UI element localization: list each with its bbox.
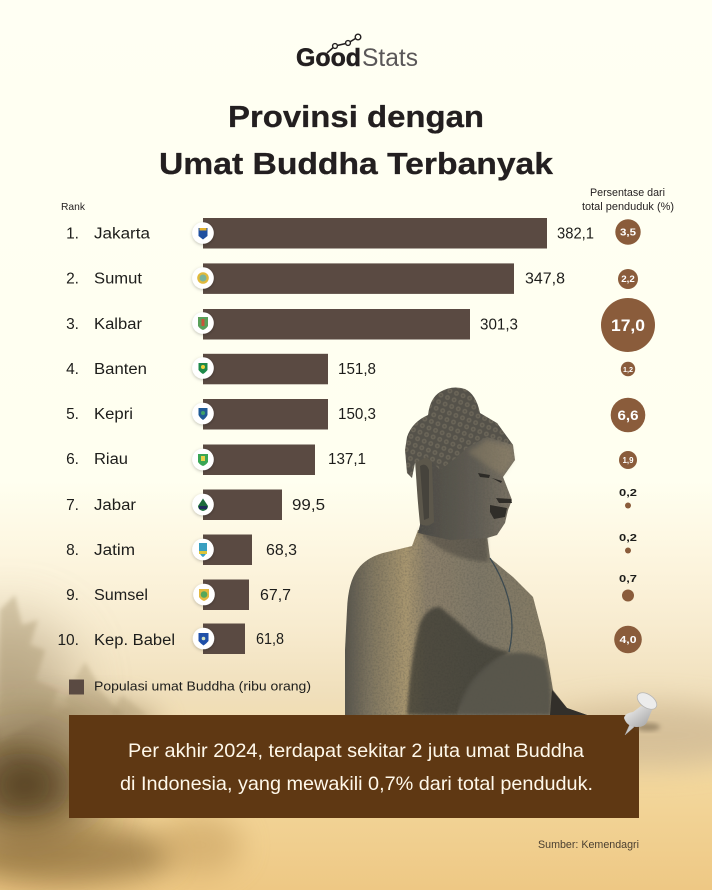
- row 4: Banten: [66, 354, 376, 384]
- icon: push pin: [624, 689, 660, 735]
- bubble: Jatim 0,2: [619, 532, 637, 554]
- row 6: Riau: 6.: [66, 451, 79, 468]
- row 8: Jatim: 68,3: [266, 542, 297, 559]
- row 5: Kepri: [66, 399, 376, 430]
- legend: Populasi umat Buddha (ribu orang): [94, 678, 311, 694]
- row 7: Jabar: 99,5: [292, 497, 325, 514]
- bubble: Kepri 6,6: 6,6: [618, 408, 639, 423]
- row 7: Jabar: Jabar: [94, 497, 136, 514]
- row 5: Kepri: Kepri: [94, 406, 133, 423]
- title: Provinsi dengan: [228, 99, 484, 134]
- row 1: Jakarta: [66, 218, 594, 248]
- row 2: Sumut: [66, 263, 565, 294]
- row 9: Sumsel: Sumsel: [94, 587, 148, 604]
- row 2: Sumut: 2.: [66, 271, 79, 288]
- row 9: Sumsel: 9.: [66, 587, 79, 604]
- row 8: Jatim: Jatim: [94, 542, 135, 559]
- row 6: Riau: 137,1: [328, 451, 366, 468]
- column header: percentage: Persentase dari: [590, 187, 665, 199]
- row 6: Riau: Riau: [94, 451, 128, 468]
- row 3: Kalbar: Kalbar: [94, 316, 142, 333]
- column header: percentage: [582, 187, 674, 213]
- bubble: Jabar 0,2: 0,2: [619, 487, 637, 499]
- row 7: Jabar: [66, 490, 325, 520]
- bubble: Sumut 2,2: [618, 269, 638, 289]
- row 2: Sumut: Sumut: [94, 271, 143, 288]
- row 1: Jakarta: 382,1: [557, 226, 594, 242]
- row 1: Jakarta: 1.: [66, 226, 79, 242]
- callout box: [69, 715, 639, 818]
- bubble: Jakarta 3,5: 3,5: [620, 228, 636, 238]
- bubble: Kepri 6,6: [611, 398, 645, 432]
- row 10: Kep. Babel: 10.: [57, 632, 79, 649]
- bubble: Kalbar 17,0: 17,0: [611, 316, 645, 335]
- row 6: Riau: [66, 444, 366, 475]
- row 10: Kep. Babel: 61,8: [256, 631, 284, 648]
- row 5: Kepri: 5.: [66, 406, 79, 423]
- row 4: Banten: 151,8: [338, 361, 376, 378]
- row 3: Kalbar: 301,3: [480, 316, 518, 334]
- bubble: Kep. Babel 4,0: 4,0: [620, 634, 637, 646]
- row 4: Banten: Banten: [94, 361, 147, 378]
- title: [159, 99, 554, 181]
- row 2: Sumut: 347,8: [525, 271, 565, 288]
- row 7: Jabar: 7.: [66, 497, 79, 514]
- row 3: Kalbar: 3.: [66, 316, 79, 333]
- callout box: Per akhir 2024, terdapat sekitar 2 juta umat Buddha: [128, 740, 584, 762]
- bubble: Sumut 2,2: 2,2: [621, 274, 635, 284]
- row 8: Jatim: 8.: [66, 542, 79, 559]
- callout box: di Indonesia, yang mewakili 0,7% dari total penduduk.: [120, 773, 593, 795]
- bubble: Sumsel 0,7: [619, 573, 637, 602]
- bubble: Banten 1,2: [621, 362, 635, 376]
- row 10: Kep. Babel: [57, 624, 284, 654]
- row 1: Jakarta: Jakarta: [94, 226, 150, 242]
- bubble: Jatim 0,2: 0,2: [619, 532, 637, 544]
- bubble: Riau 1,9: 1,9: [622, 455, 634, 465]
- row 3: Kalbar: [66, 309, 518, 340]
- row 5: Kepri: 150,3: [338, 406, 376, 423]
- row 4: Banten: 4.: [66, 361, 79, 378]
- column header: rank: Rank: [61, 201, 86, 213]
- statue: seated Buddha: [345, 388, 587, 715]
- bubble: Sumsel 0,7: 0,7: [619, 573, 637, 585]
- logo: GoodStats: [296, 34, 418, 72]
- bubble: Kep. Babel 4,0: [614, 626, 642, 653]
- row 9: Sumsel: 67,7: [260, 587, 291, 604]
- title: Umat Buddha Terbanyak: [159, 146, 554, 181]
- row 9: Sumsel: [66, 580, 291, 610]
- row 8: Jatim: [66, 534, 297, 565]
- logo: GoodStats: Good: [296, 44, 361, 72]
- bubble: Jakarta 3,5: [615, 219, 641, 245]
- row 10: Kep. Babel: Kep. Babel: [94, 632, 175, 649]
- bubble: Kalbar 17,0: [601, 298, 655, 352]
- bubble: Riau 1,9: [619, 451, 637, 469]
- source: Sumber: Kemendagri: [538, 839, 639, 851]
- bubble: Jabar 0,2: [619, 487, 637, 508]
- bubble: Banten 1,2: 1,2: [623, 365, 633, 374]
- column header: percentage: total penduduk (%): [582, 201, 674, 213]
- logo: GoodStats: Stats: [362, 44, 418, 72]
